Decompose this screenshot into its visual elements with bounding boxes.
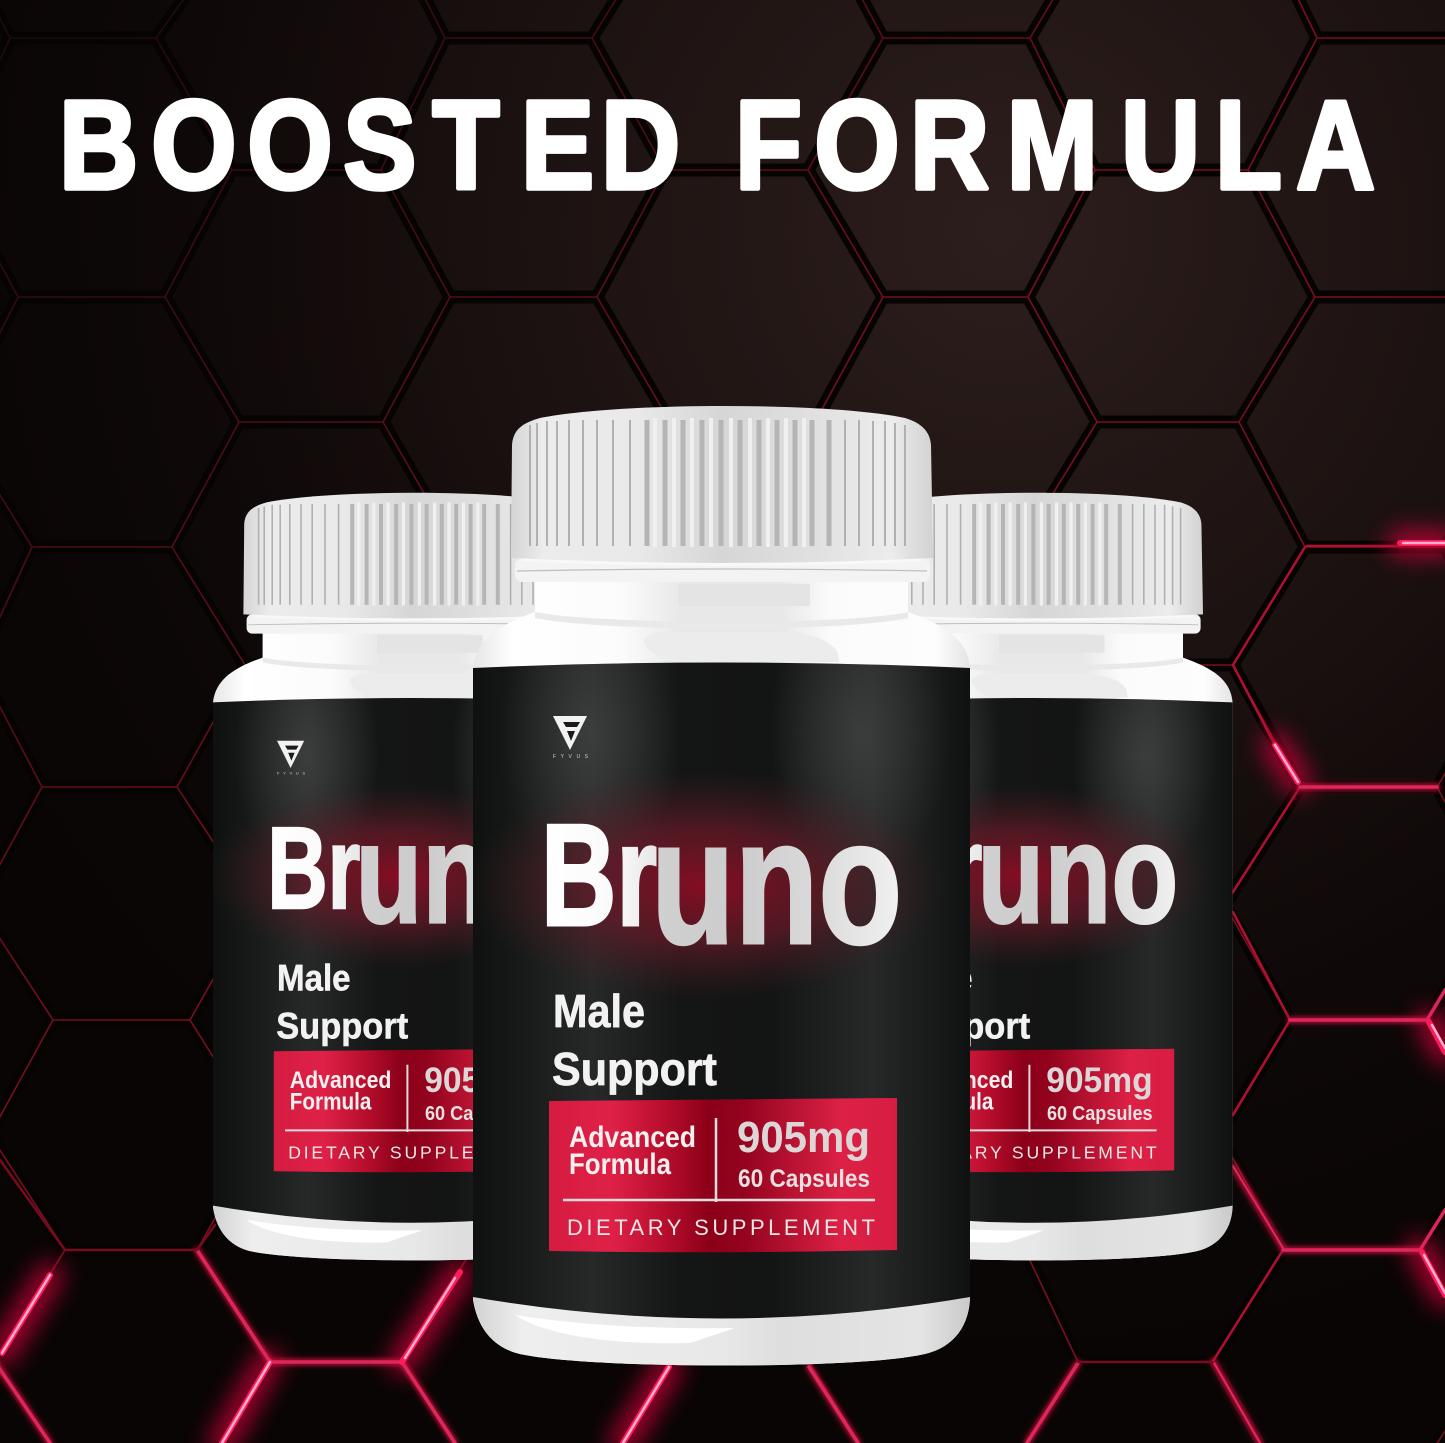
brand name: [889, 794, 1178, 953]
product name: [552, 985, 717, 1095]
red info box: Advanced: [912, 1067, 1013, 1094]
bottle: left: [213, 492, 535, 1260]
red info box: Advanced: [290, 1067, 391, 1094]
red info box: DIETARY SUPPLEMENT: [910, 1142, 1157, 1162]
red info box: 905mg: [424, 1061, 531, 1100]
product name: Support: [898, 1005, 1030, 1046]
red info box: Formula: [569, 1148, 671, 1181]
red info box: 905mg: [737, 1113, 870, 1162]
glow: neon hexagon lines: [0, 543, 1445, 1443]
red info box: Advanced: [569, 1121, 696, 1154]
brand name: Br: [889, 805, 982, 933]
logo: FYVUS: [277, 770, 305, 775]
bottle: right: [908, 492, 1233, 1260]
red info box: 60 Capsules: [738, 1165, 870, 1193]
logo: FYVUS: [553, 754, 589, 760]
bottle: center: [473, 406, 970, 1366]
red info box: 905mg: [1046, 1061, 1153, 1100]
product name: Support: [276, 1005, 408, 1046]
glow: ambient red halos: [2, 543, 1445, 1443]
logo: [553, 716, 589, 760]
logo: [277, 741, 305, 775]
brand name: uno: [977, 794, 1178, 953]
brand name: [267, 794, 556, 953]
product name: Male: [277, 957, 351, 998]
red info box: 60 Capsules: [1047, 1103, 1153, 1125]
brand name: uno: [355, 794, 556, 953]
brand name: uno: [651, 782, 902, 981]
red info box: Formula: [290, 1089, 372, 1116]
title: BOOSTED FORMULA: [59, 75, 1375, 216]
brand name: [541, 782, 902, 981]
red info box: DIETARY SUPPLEMENT: [567, 1215, 875, 1240]
red info box: [896, 1049, 1174, 1172]
red info box: Formula: [912, 1089, 994, 1116]
red info box: 60 Capsules: [425, 1103, 531, 1125]
product name: Support: [552, 1043, 717, 1095]
product name: [898, 957, 1030, 1046]
red info box: [549, 1098, 897, 1252]
red info box: DIETARY SUPPLEMENT: [288, 1142, 535, 1162]
brand name: Br: [267, 805, 360, 933]
product name: [276, 957, 408, 1046]
product name: Male: [899, 957, 973, 998]
brand name: Br: [541, 794, 657, 956]
red info box: [274, 1049, 552, 1172]
product name: Male: [553, 985, 645, 1037]
